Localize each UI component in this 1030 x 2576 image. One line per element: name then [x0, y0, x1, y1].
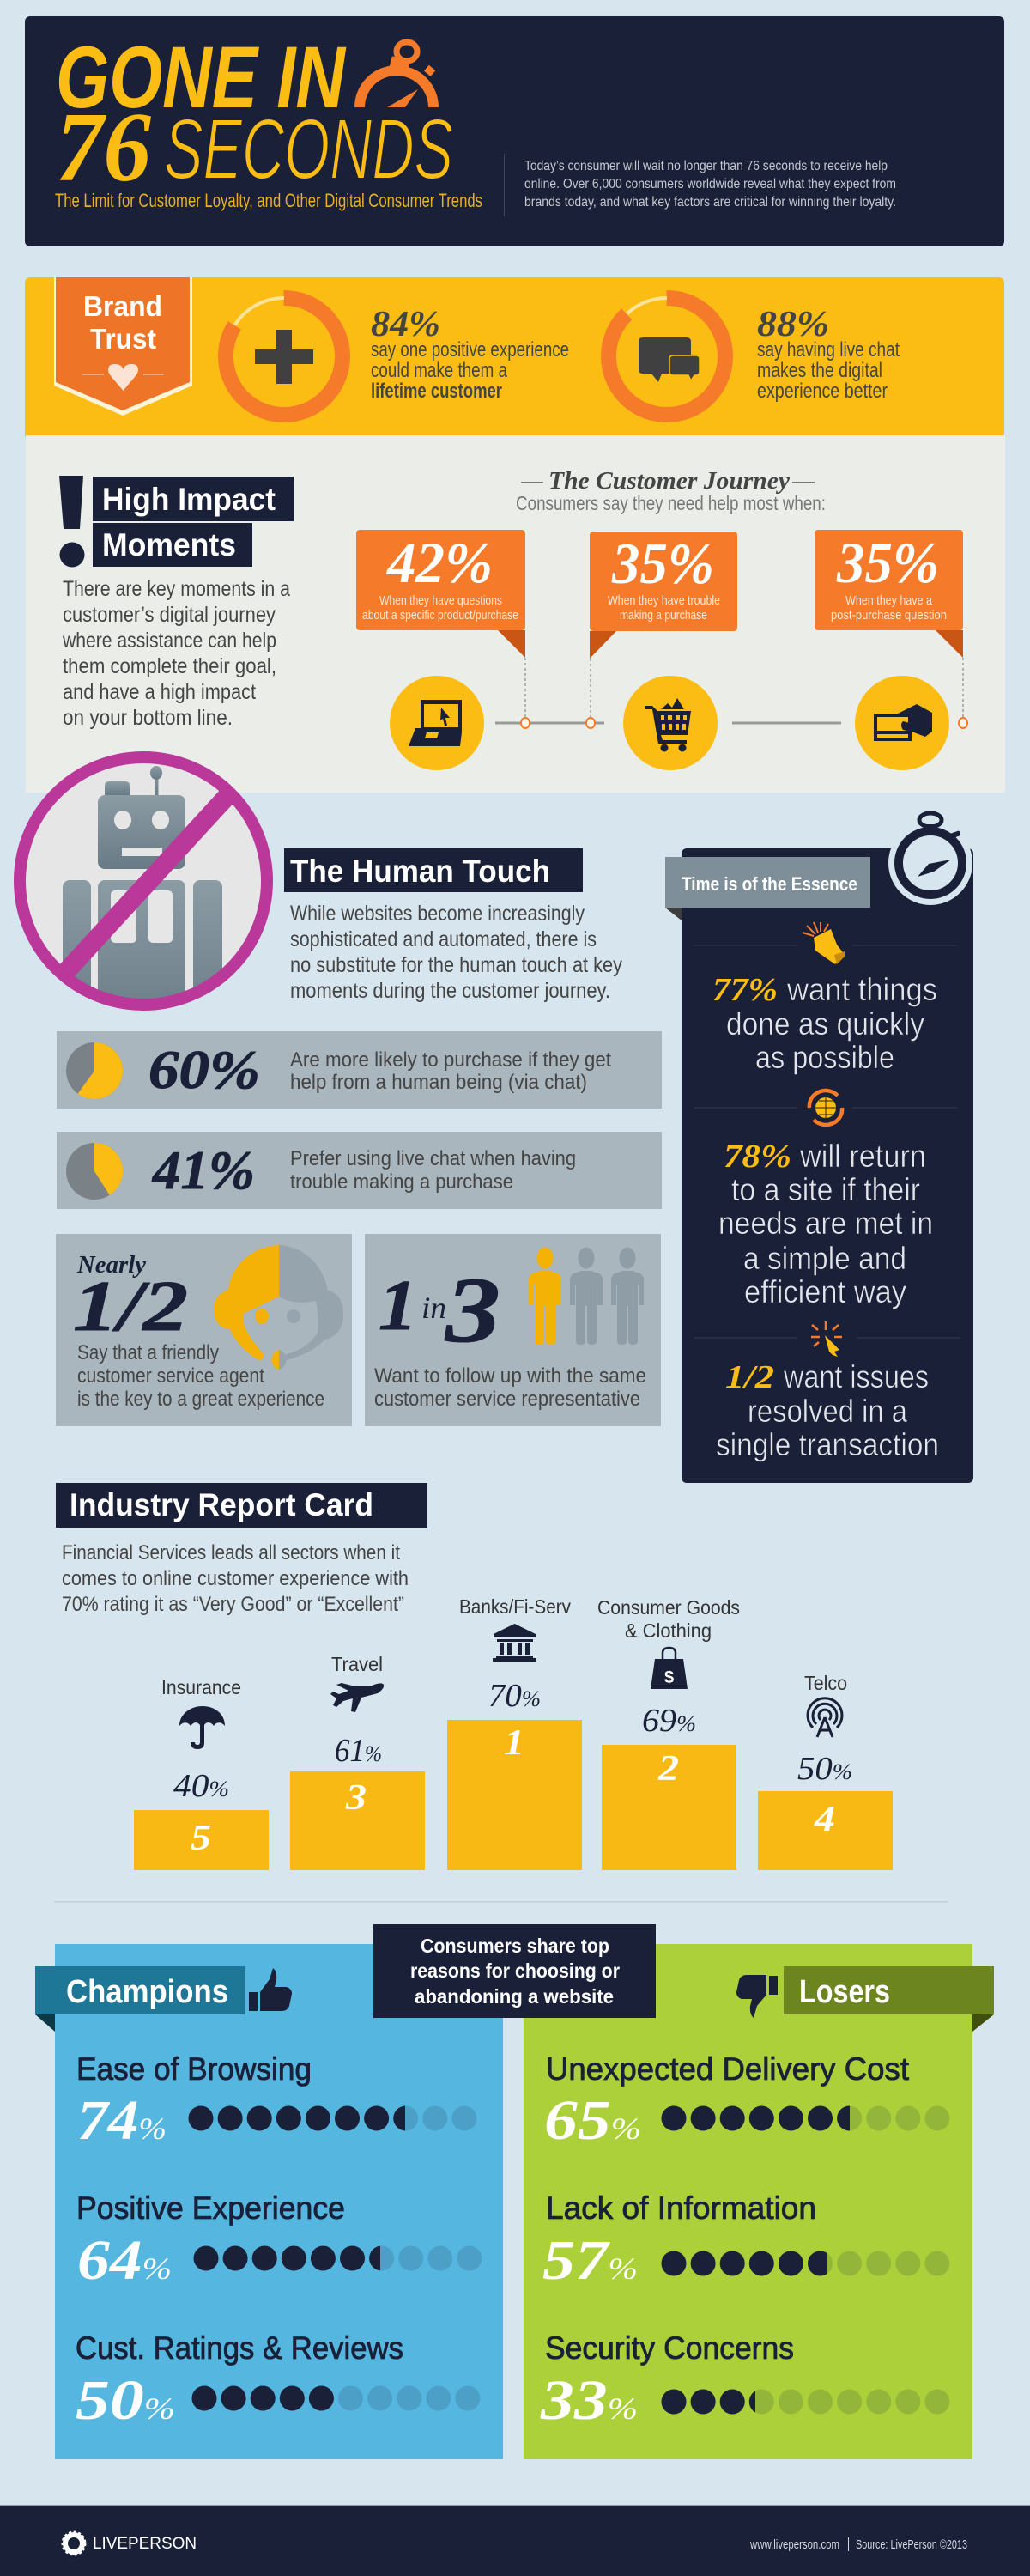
stat bar: 41%: trouble making a purchase — [290, 1170, 513, 1194]
text: key moments: There are key moments in a — [63, 577, 290, 601]
footer: LIVEPERSON — [93, 2535, 197, 2553]
bar: consumer goods: $ — [664, 1668, 674, 1687]
icon: thumbs up — [249, 1968, 292, 2011]
callout: consumers share top reasons: abandoning a website — [415, 1985, 614, 2008]
stat: 78%: a simple and — [743, 1241, 906, 1276]
panel: 1 in 3: Want to follow up with the same — [374, 1364, 646, 1388]
bar: insurance: Insurance — [161, 1676, 241, 1698]
stat: 88%: say having live chat — [757, 338, 900, 361]
text: key moments: on your bottom line. — [63, 706, 233, 730]
footer source text: Source: LivePerson ©2013 — [856, 2537, 967, 2552]
panel: nearly 1/2: Nearly — [76, 1252, 147, 1279]
stat: 78%: needs are met in — [718, 1206, 933, 1241]
row: lack of information: Lack of Information — [546, 2190, 816, 2226]
bar: consumer goods: & Clothing — [625, 1619, 712, 1642]
text: key moments: where assistance can help — [62, 629, 276, 653]
callout: 42%: 42% — [385, 530, 493, 595]
text: key moments: them complete their goal, — [63, 654, 276, 678]
subtitle: The Limit for Customer Loyalty, and Other Digital Consumer Trends — [55, 190, 482, 211]
pie chart: 60% — [66, 1042, 123, 1099]
stat bar: 60% — [57, 1031, 662, 1109]
text: human touch intro: moments during the customer journey. — [290, 979, 610, 1003]
footer — [0, 2505, 1030, 2576]
ribbon: losers — [784, 1966, 994, 2032]
panel: 1 in 3: in — [421, 1291, 446, 1325]
heading: industry report card: Industry Report Card — [70, 1487, 373, 1522]
bar: telco — [758, 1672, 893, 1870]
bar: travel: 3 — [345, 1778, 367, 1818]
text: industry intro: 70% rating it as “Very Good” or “Excellent” — [62, 1593, 404, 1616]
stat bar: 41%: 41% — [152, 1139, 255, 1200]
text: human touch intro — [290, 902, 622, 1003]
bar: travel: 61% — [335, 1733, 382, 1769]
panel: header — [25, 16, 1004, 246]
stat: 84%: say one positive experience — [371, 338, 569, 361]
stat: 84%: lifetime customer — [371, 380, 502, 403]
footer source text — [749, 2537, 967, 2552]
icon: no robots — [14, 751, 273, 1035]
callout: consumers share top reasons — [373, 1924, 656, 2018]
panel: nearly 1/2: Say that a friendly — [77, 1341, 220, 1364]
panel: nearly 1/2 — [56, 1234, 352, 1426]
intro text: online. Over 6,000 consumers worldwide reveal what they expect from — [524, 177, 896, 191]
stat: 1/2: want issues — [783, 1359, 929, 1394]
bar: consumer goods: Consumer Goods — [597, 1596, 740, 1619]
row: ease of browsing: Ease of Browsing — [76, 2051, 312, 2087]
text: industry intro — [62, 1541, 409, 1616]
title: GONE IN — [56, 28, 347, 126]
text: key moments: and have a high impact — [63, 680, 256, 704]
callout: 35% post-purchase — [815, 530, 963, 658]
stat: 88%: experience better — [757, 380, 888, 403]
icon: stopwatch — [888, 813, 972, 905]
icon: snapping hand — [803, 922, 845, 964]
row: unexpected delivery cost: 65 % — [544, 2089, 641, 2152]
callout: 42%: about a specific product/purchase — [362, 609, 518, 623]
bar: telco: 4 — [814, 1800, 835, 1839]
bar: telco: 50% — [797, 1751, 852, 1787]
stat: 78% — [718, 1139, 933, 1309]
row: ratings and reviews — [76, 2336, 481, 2420]
bar chart: industry report card — [134, 1595, 893, 1870]
text: human touch intro: no substitute for the human touch at key — [290, 953, 622, 977]
icon: laptop — [390, 676, 484, 770]
text: human touch intro: While websites become increasingly — [290, 902, 585, 926]
callout: 35% post-purchase: When they have a — [845, 594, 933, 608]
footer source text: www.liveperson.com — [749, 2537, 839, 2552]
intro text: Today’s consumer will wait no longer than 76 seconds to receive help — [524, 159, 888, 173]
bar: banks: Banks/Fi-Serv — [459, 1595, 571, 1618]
heading: high impact moments: High Impact — [102, 482, 276, 517]
panel: nearly 1/2: customer service agent — [77, 1364, 264, 1388]
callout: 35% trouble: When they have trouble — [608, 594, 720, 608]
stat bar: 60%: 60% — [148, 1039, 260, 1100]
bar: banks: 1 — [504, 1723, 524, 1763]
row: positive experience: 64 % — [77, 2229, 172, 2292]
ribbon: brand trust: Brand — [83, 290, 162, 322]
row: ratings and reviews: Cust. Ratings & Reviews — [76, 2330, 403, 2366]
row: security concerns: Security Concerns — [545, 2330, 794, 2366]
bar: banks — [447, 1595, 582, 1870]
bar: insurance — [134, 1676, 269, 1870]
pie chart: 41% — [66, 1143, 123, 1200]
bar: insurance: 5 — [191, 1819, 211, 1858]
panel: nearly 1/2: is the key to a great experience — [77, 1388, 324, 1411]
row: unexpected delivery cost — [546, 2056, 949, 2140]
bar: telco: Telco — [804, 1672, 847, 1694]
heading: the human touch: The Human Touch — [290, 854, 550, 889]
title — [56, 28, 453, 203]
stat: 77%: done as quickly — [726, 1006, 924, 1042]
stat: 77%: as possible — [755, 1040, 894, 1075]
stat: 1/2: 1/2 — [725, 1359, 774, 1395]
stat bar: 60%: Are more likely to purchase if they get — [290, 1048, 611, 1072]
icon: customer service agent — [214, 1245, 343, 1370]
panel: time is of the essence — [665, 813, 973, 1483]
donut: 88% — [609, 298, 725, 415]
stat bar: 41% — [57, 1132, 662, 1209]
panel: 1 in 3 — [365, 1234, 661, 1426]
row: unexpected delivery cost: Unexpected Delivery Cost — [546, 2051, 910, 2087]
panel: champions — [35, 1944, 503, 2459]
text: industry intro: Financial Services leads all sectors when it — [62, 1541, 400, 1564]
intro text — [524, 159, 896, 210]
label: time is of the essence: Time is of the Essence — [682, 873, 857, 895]
panel: nearly 1/2: 1/2 — [73, 1267, 188, 1346]
heading: industry report card — [56, 1483, 427, 1528]
stat: 78%: 78% — [724, 1139, 791, 1175]
callout: 35% trouble — [590, 531, 737, 659]
row: lack of information: 57 % — [542, 2229, 638, 2292]
bar: consumer goods: 69% — [642, 1703, 696, 1739]
icon: clicking cursor — [811, 1321, 842, 1357]
callout: 42%: When they have questions — [379, 594, 502, 608]
stat: 78%: efficient way — [744, 1274, 906, 1309]
callout: 35% trouble: 35% — [611, 531, 714, 596]
stat: 84% — [371, 305, 569, 403]
heading: customer journey: The Customer Journey — [548, 467, 790, 495]
icon: globe with arrows — [809, 1091, 842, 1125]
text: industry intro: comes to online customer experience with — [62, 1567, 409, 1590]
ribbon: champions: Champions — [66, 1974, 228, 2010]
stat: 77%: want things — [786, 972, 937, 1007]
heading: customer journey: Consumers say they need help most when: — [516, 492, 826, 514]
heading: high impact moments — [93, 477, 294, 567]
bar: insurance: 40% — [173, 1768, 229, 1804]
text: key moments: customer’s digital journey — [63, 603, 276, 627]
stat: 77%: 77% — [712, 972, 778, 1008]
callout: 35% trouble: making a purchase — [620, 609, 707, 623]
callout: consumers share top reasons: Consumers share top — [421, 1935, 609, 1957]
icon: chat bubbles — [639, 337, 700, 382]
stat: 1/2 — [716, 1359, 939, 1462]
callout: 35% post-purchase: post-purchase question — [831, 609, 947, 623]
title: SECONDS — [164, 101, 453, 197]
stat: 78%: to a site if their — [731, 1172, 920, 1207]
panel: 1 in 3: 1 — [379, 1266, 417, 1346]
text: human touch intro: sophisticated and automated, there is — [290, 927, 597, 951]
icon: credit card — [855, 676, 949, 770]
icon: shopping cart — [623, 676, 718, 770]
stat: 88%: makes the digital — [757, 359, 882, 382]
timeline connectors — [495, 658, 967, 728]
stat: 77% — [712, 972, 937, 1075]
panel: losers — [524, 1944, 994, 2459]
callout: 35% post-purchase: 35% — [836, 530, 939, 595]
row: positive experience: Positive Experience — [76, 2190, 345, 2226]
ribbon: brand trust: Trust — [90, 323, 156, 355]
panel: 1 in 3: 3 — [445, 1260, 500, 1362]
label: time is of the essence — [665, 857, 870, 920]
ribbon: brand trust — [54, 277, 192, 416]
panel: high impact moments — [26, 435, 1005, 793]
heading: high impact moments: Moments — [102, 527, 236, 562]
row: positive experience — [79, 2195, 482, 2279]
row: ratings and reviews: 50 % — [76, 2369, 175, 2432]
icon: plus — [255, 330, 313, 384]
stat: 88%: 88% — [757, 305, 829, 344]
text: key moments — [62, 577, 290, 730]
icon: three people — [529, 1247, 644, 1345]
stat: 1/2: resolved in a — [748, 1394, 907, 1429]
stat: 1/2: single transaction — [716, 1427, 939, 1462]
icon: orange stopwatch — [354, 42, 439, 107]
panel: 1 in 3: customer service representative — [374, 1388, 640, 1411]
bar: banks: 70% — [488, 1678, 541, 1714]
ribbon: champions — [35, 1966, 245, 2032]
bar: travel — [290, 1653, 425, 1870]
panel: brand trust — [25, 277, 1004, 440]
ribbon: losers: Losers — [799, 1974, 890, 2010]
icon: exclamation mark — [59, 476, 84, 567]
heading: customer journey — [516, 467, 826, 514]
intro text: brands today, and what key factors are critical for winning their loyalty. — [524, 195, 896, 210]
title: 76 — [56, 93, 151, 203]
row: ease of browsing — [79, 2056, 477, 2140]
row: security concerns — [540, 2336, 949, 2420]
icon: thumbs down — [736, 1975, 778, 2018]
stat: 88% — [757, 305, 900, 403]
donut: 84% — [226, 298, 342, 415]
stat bar: 60%: help from a human being (via chat) — [290, 1071, 587, 1094]
callout: consumers share top reasons: reasons for choosing or — [410, 1959, 620, 1982]
bar: consumer goods — [597, 1596, 740, 1870]
row: lack of information — [542, 2195, 949, 2279]
stat: 84%: 84% — [371, 305, 440, 344]
row: ease of browsing: 74% — [77, 2089, 167, 2152]
stat: 78%: will return — [799, 1139, 926, 1174]
bar: travel: Travel — [331, 1653, 383, 1675]
stat: 84%: could make them a — [371, 359, 508, 382]
callout: 42% — [356, 530, 525, 658]
row: security concerns: 33 % — [540, 2369, 638, 2432]
bar: consumer goods: 2 — [657, 1749, 679, 1789]
stat bar: 41%: Prefer using live chat when having — [290, 1147, 576, 1170]
icon: liveperson logo — [63, 2532, 85, 2555]
